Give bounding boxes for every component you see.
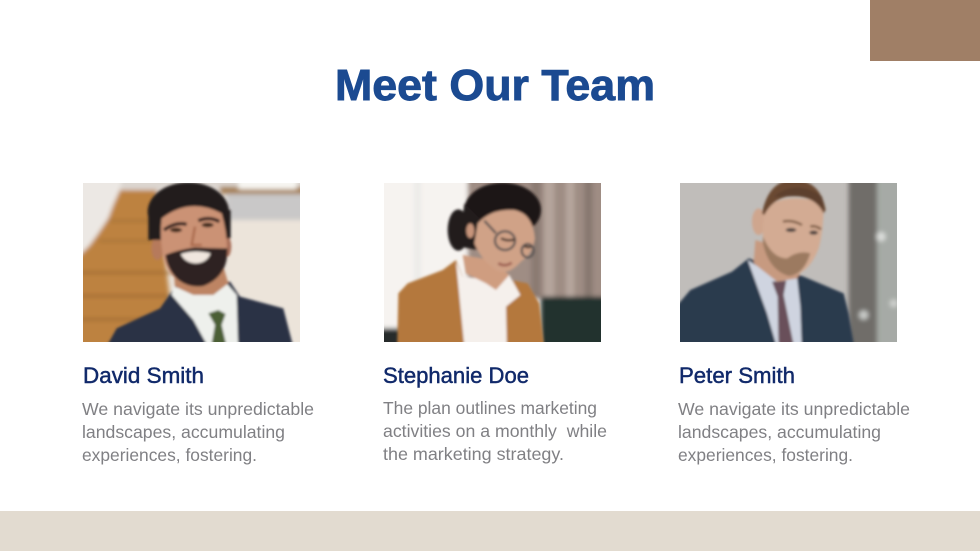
shirt (172, 283, 238, 353)
ear (752, 208, 765, 235)
description: Peter Smith: experiences, fostering. (678, 445, 853, 465)
nose (192, 227, 202, 245)
name: Peter Smith: Peter Smith (679, 363, 795, 388)
glasses (484, 221, 534, 257)
title: Meet Our Team (335, 61, 655, 110)
suit (107, 280, 294, 342)
corner accent block (870, 0, 980, 61)
beard (165, 247, 227, 286)
description: Stephanie Doe (383, 398, 607, 464)
team member: Peter Smith (670, 173, 910, 465)
bottom band (0, 511, 980, 551)
description: David Smith: We navigate its unpredictable (82, 399, 314, 419)
photo: Stephanie Doe (384, 183, 601, 342)
tie (208, 310, 228, 353)
neck (173, 267, 228, 295)
face (474, 210, 535, 272)
description: Peter Smith: We navigate its unpredictable (678, 399, 910, 419)
description: David Smith: landscapes, accumulating (82, 422, 285, 442)
photo: Peter Smith (680, 183, 897, 342)
description: Stephanie Doe: activities on a monthly while (383, 421, 607, 441)
photo: David Smith (83, 183, 300, 342)
mouth (181, 251, 211, 263)
neck (754, 240, 810, 282)
name: Stephanie Doe: Stephanie Doe (383, 363, 529, 388)
description: Peter Smith (678, 399, 910, 465)
description: David Smith (82, 399, 314, 465)
team member: Stephanie Doe (383, 183, 606, 464)
team member: David Smith (73, 173, 314, 465)
description: Peter Smith: landscapes, accumulating (678, 422, 881, 442)
tie (772, 281, 795, 353)
hair (762, 180, 826, 215)
blazer (397, 260, 545, 353)
beard (763, 237, 810, 276)
suit (680, 256, 855, 342)
description: Stephanie Doe: the marketing strategy. (383, 444, 564, 464)
hair (464, 183, 543, 227)
ear (151, 237, 163, 260)
hair (148, 182, 229, 241)
hair bun (448, 209, 469, 251)
name: David Smith: David Smith (83, 363, 204, 388)
shirt (456, 262, 520, 353)
eyes and brows (786, 228, 796, 232)
description: David Smith: experiences, fostering. (82, 445, 257, 465)
face (161, 206, 227, 286)
neck (463, 255, 509, 290)
description: Stephanie Doe: The plan outlines marketing (383, 398, 597, 418)
face (763, 198, 824, 276)
shirt (748, 260, 802, 353)
ear (466, 223, 474, 238)
eyes and brows (170, 228, 182, 232)
eyelids and lips (501, 238, 531, 247)
